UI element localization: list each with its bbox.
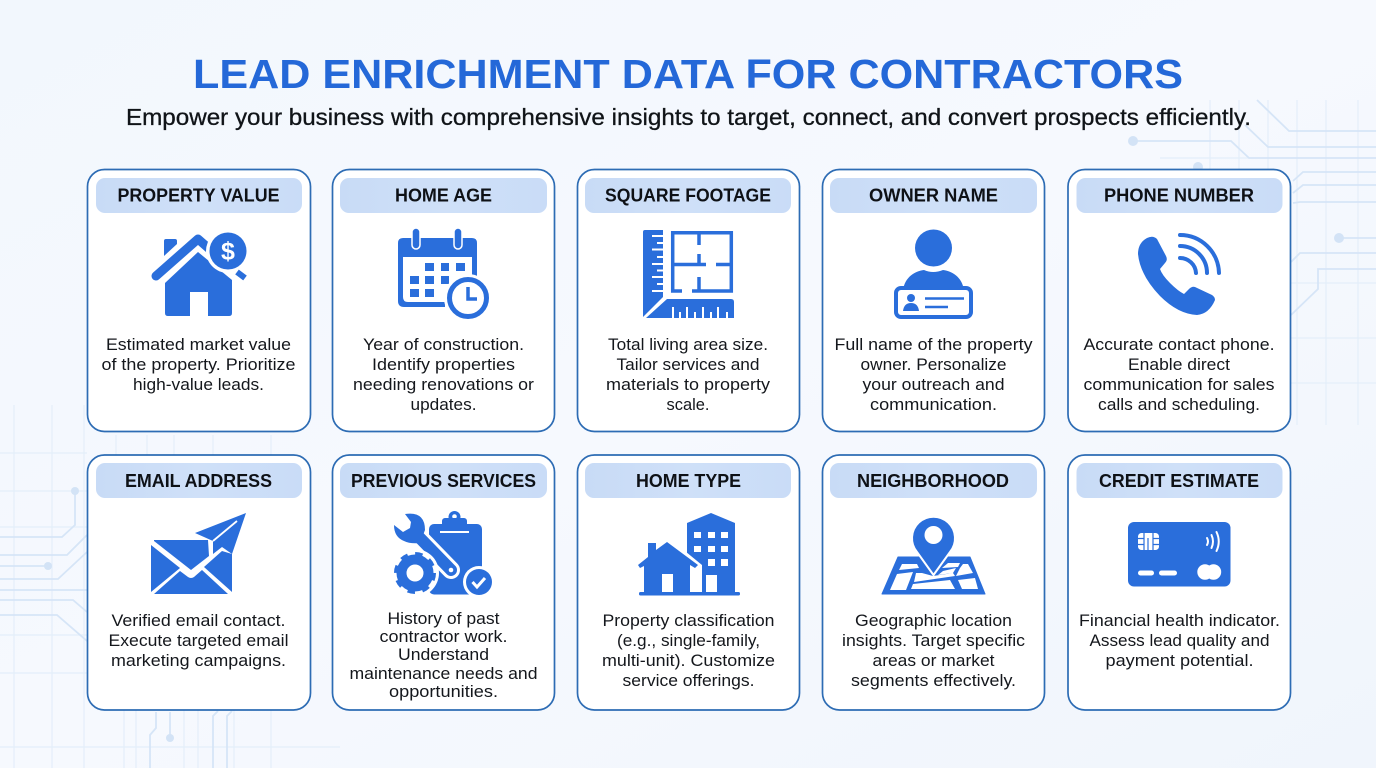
description: calls and scheduling. <box>1098 395 1260 414</box>
panel: neighborhood <box>822 455 1044 710</box>
description <box>602 611 775 690</box>
description: needing renovations or <box>353 375 534 394</box>
description: Execute targeted email <box>108 631 288 650</box>
heading: square footage: SQUARE FOOTAGE <box>605 186 771 206</box>
icon: phone with signal arcs <box>1138 235 1219 315</box>
description: multi-unit). Customize <box>602 651 775 670</box>
heading: owner name: OWNER NAME <box>869 186 998 206</box>
title: LEAD ENRICHMENT DATA FOR CONTRACTORS <box>193 51 1183 97</box>
panel: credit estimate <box>1068 455 1290 710</box>
heading: square footage <box>585 178 791 213</box>
description: segments effectively. <box>851 671 1016 690</box>
description <box>1079 611 1280 670</box>
description: marketing campaigns. <box>111 651 286 670</box>
heading: phone number <box>1076 178 1282 213</box>
heading: previous services: PREVIOUS SERVICES <box>351 471 536 491</box>
icon: house with dollar magnifier: $ <box>221 238 235 266</box>
description: Enable direct <box>1128 355 1230 374</box>
heading: property value <box>96 178 302 213</box>
description: of the property. Prioritize <box>102 355 296 374</box>
panel: home age <box>332 170 554 432</box>
description <box>353 335 534 414</box>
description <box>102 335 296 394</box>
icon: credit card <box>1128 522 1230 586</box>
description: insights. Target specific <box>842 631 1026 650</box>
description: Year of construction. <box>363 335 524 354</box>
background circuit: bottom left <box>0 405 340 768</box>
description: Accurate contact phone. <box>1084 335 1274 354</box>
description: updates. <box>410 395 476 414</box>
heading: previous services <box>340 463 547 498</box>
description: History of past <box>388 609 500 628</box>
heading: credit estimate: CREDIT ESTIMATE <box>1099 471 1259 491</box>
panel: previous services <box>332 455 554 710</box>
description <box>834 335 1033 414</box>
description: (e.g., single-family, <box>617 631 760 650</box>
heading: neighborhood <box>830 463 1037 498</box>
description <box>1084 335 1274 414</box>
description: Understand <box>398 645 489 664</box>
panel: owner name <box>822 170 1044 432</box>
description: Property classification <box>602 611 774 630</box>
description: materials to property <box>606 375 771 394</box>
description: Tailor services and <box>616 355 760 374</box>
heading: property value: PROPERTY VALUE <box>118 186 280 206</box>
description: your outreach and <box>862 375 1004 394</box>
description: communication. <box>870 395 997 414</box>
heading: owner name <box>830 178 1037 213</box>
heading: home age: HOME AGE <box>395 186 492 206</box>
panel: square footage <box>578 170 800 432</box>
heading: home age <box>340 178 547 213</box>
description: Full name of the property <box>834 335 1033 354</box>
description: Verified email contact. <box>112 611 286 630</box>
description: Financial health indicator. <box>1079 611 1280 630</box>
description <box>108 611 288 670</box>
heading: email address <box>96 463 302 498</box>
panel: email address <box>88 455 310 710</box>
icon: house with dollar magnifier <box>156 229 250 316</box>
heading: email address: EMAIL ADDRESS <box>125 471 272 491</box>
description: areas or market <box>872 651 995 670</box>
description: owner. Personalize <box>860 355 1006 374</box>
description: communication for sales <box>1084 375 1274 394</box>
description: Geographic location <box>855 611 1012 630</box>
icon: calendar with clock <box>398 228 492 322</box>
heading: home type <box>585 463 791 498</box>
panel: home type <box>578 455 800 710</box>
description: opportunities. <box>389 682 498 701</box>
icon: house and apartment building <box>638 513 740 596</box>
description: Identify properties <box>372 355 515 374</box>
subtitle: Empower your business with comprehensive insights to target, connect, and convert prospects efficiently. <box>126 104 1251 130</box>
description: maintenance needs and <box>350 664 538 683</box>
heading: phone number: PHONE NUMBER <box>1104 186 1254 206</box>
description: scale. <box>666 395 710 414</box>
description <box>842 611 1026 690</box>
panel: property value <box>88 170 310 432</box>
icon: envelope and paper plane <box>151 513 246 594</box>
panel: phone number <box>1068 170 1290 432</box>
heading: home type: HOME TYPE <box>636 471 741 491</box>
heading: credit estimate <box>1076 463 1282 498</box>
description: contractor work. <box>380 627 508 646</box>
heading: neighborhood: NEIGHBORHOOD <box>857 471 1009 491</box>
icon: wrench, gear and clipboard <box>391 511 495 598</box>
description: high-value leads. <box>133 375 264 394</box>
background circuit: top right <box>1128 100 1376 430</box>
icon: map with location pin <box>882 517 985 594</box>
description <box>350 609 538 701</box>
description: payment potential. <box>1106 651 1254 670</box>
description <box>606 335 771 414</box>
icon: floor plan and rulers <box>643 230 734 318</box>
description: Assess lead quality and <box>1090 631 1270 650</box>
description: service offerings. <box>622 671 754 690</box>
description: Total living area size. <box>608 335 768 354</box>
icon: person with ID card <box>896 230 971 317</box>
description: Estimated market value <box>106 335 291 354</box>
